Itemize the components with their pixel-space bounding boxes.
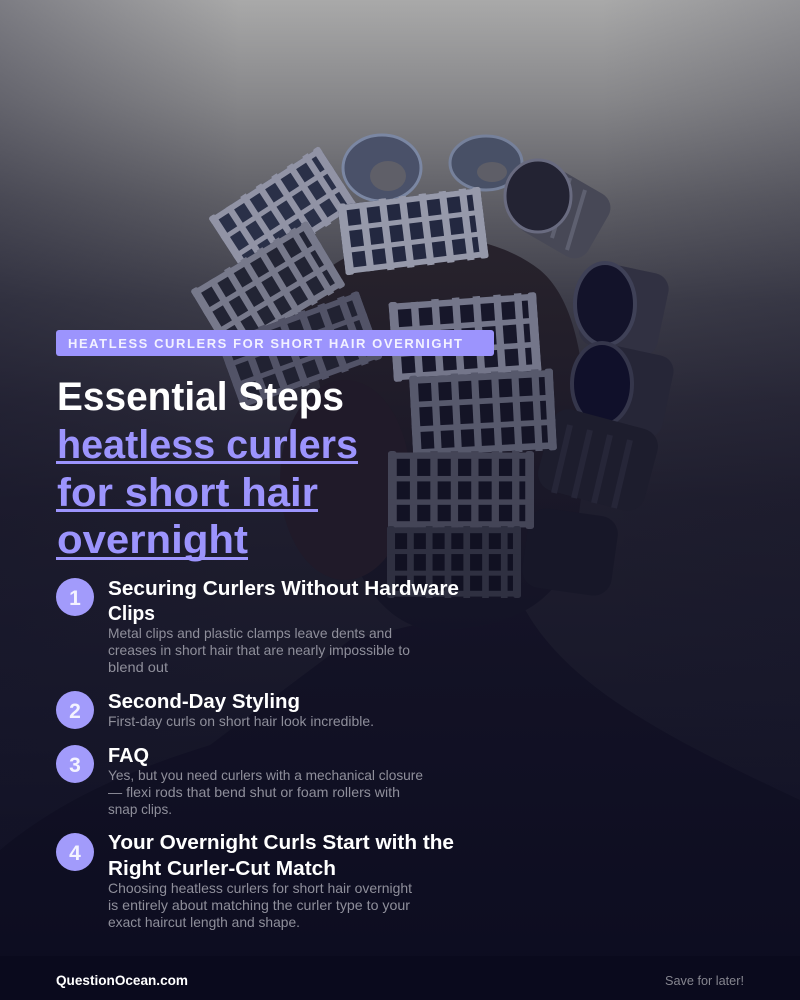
step 2 heading: Second-Day Styling [108, 691, 300, 713]
step 3 number: 3 [69, 754, 81, 777]
step 1 description: Metal clips and plastic clamps leave dents and [108, 625, 392, 641]
save for later note: Save for later! [665, 973, 744, 988]
title: Essential Steps [57, 375, 344, 419]
title: overnight [57, 518, 248, 562]
step 4 number: 4 [69, 842, 81, 865]
step 3 [56, 745, 423, 817]
step 4 description [108, 880, 412, 930]
step 1 description [108, 625, 410, 675]
roller: right side two [572, 341, 676, 441]
title: heatless curlers [57, 423, 358, 467]
step 1 [56, 578, 459, 675]
step 4 description: Choosing heatless curlers for short hair overnight [108, 880, 412, 896]
step 2 number: 2 [69, 700, 81, 723]
step 4 description: exact haircut length and shape. [108, 914, 300, 930]
step 4 description: is entirely about matching the curler type to your [108, 897, 410, 913]
roller: top left coil [343, 135, 421, 201]
footer bar [0, 956, 800, 1000]
title [56, 375, 358, 562]
roller: grid curler right one [388, 292, 542, 382]
step 4 heading: Your Overnight Curls Start with the [108, 832, 454, 854]
step 3 description [108, 767, 423, 817]
ear and skin [280, 380, 410, 580]
step 4 number [56, 833, 94, 871]
step 3 description: — flexi rods that bend shut or foam rollers with [108, 784, 400, 800]
hair mass [300, 237, 585, 630]
roller: top right dark coil [505, 160, 616, 264]
step 1 number [56, 578, 94, 616]
step 3 number [56, 745, 94, 783]
step 1 description: blend out [108, 659, 168, 675]
roller: grid curler second left [190, 220, 346, 356]
step 3 description: Yes, but you need curlers with a mechanical closure [108, 767, 423, 783]
roller: right side three [534, 405, 662, 515]
roller: grid curler right four [387, 526, 521, 598]
step 4 heading [108, 832, 454, 880]
step 4 heading: Right Curler-Cut Match [108, 858, 336, 880]
roller: right side one [575, 260, 672, 359]
brand name: QuestionOcean.com [56, 972, 188, 988]
step 1 heading: Securing Curlers Without Hardware [108, 578, 459, 600]
step 3 description: snap clips. [108, 801, 172, 817]
roller: right side four [520, 506, 620, 598]
category badge: HEATLESS CURLERS FOR SHORT HAIR OVERNIGHT [68, 336, 462, 351]
step 1 heading [108, 578, 459, 625]
shoulders and neck [0, 600, 800, 1000]
step 2 number [56, 691, 94, 729]
step 2 description: First-day curls on short hair look incredible. [108, 713, 374, 729]
step 3 heading: FAQ [108, 745, 149, 767]
category badge [56, 330, 494, 356]
roller: grid curler third left [217, 291, 383, 409]
roller: grid curler top left [208, 146, 358, 278]
step 2 [56, 691, 374, 729]
roller: top middle coil [450, 136, 522, 190]
roller: grid curler right two [409, 368, 557, 458]
step 1 number: 1 [69, 587, 81, 610]
step 4 [56, 832, 454, 930]
roller: grid curler right three [388, 451, 534, 529]
step 1 description: creases in short hair that are nearly impossible to [108, 642, 410, 658]
roller: grid curler top centre [337, 186, 489, 276]
title: for short hair [57, 471, 318, 515]
step 1 heading: Clips [108, 603, 155, 625]
